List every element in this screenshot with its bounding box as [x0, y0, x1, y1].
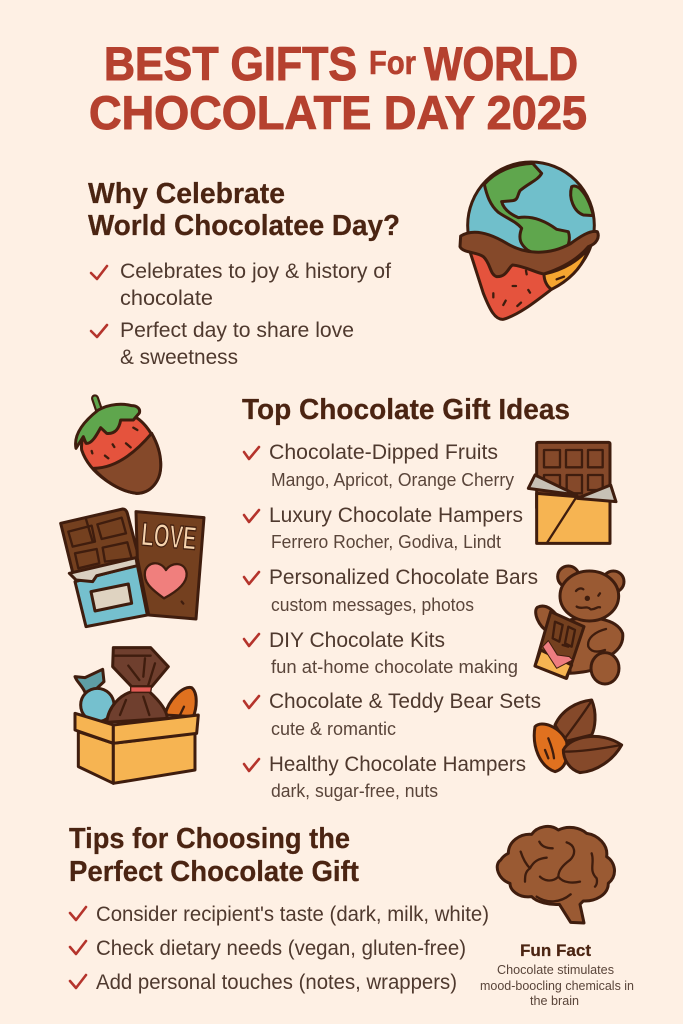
callout: fun fact	[480, 941, 634, 1008]
item: luxury hampers: Luxury Chocolate Hampers	[269, 503, 523, 527]
icon: gift box of chocolates	[75, 648, 198, 783]
item: teddy bear sets: cute & romantic	[271, 719, 396, 739]
callout: fun fact: Chocolate stimulates	[497, 963, 614, 977]
icon: chocolate bars with love	[61, 509, 204, 627]
item: dipped fruits: Chocolate-Dipped Fruits	[269, 440, 498, 464]
item: healthy hampers	[244, 752, 526, 801]
heading: top chocolate gift ideas: Top Chocolate Gift Ideas	[242, 394, 570, 426]
heading: tips: Perfect Chocolate Gift	[69, 856, 359, 888]
panel: top gift ideas	[242, 394, 570, 801]
item: diy kits: fun at-home chocolate making	[271, 657, 518, 677]
title	[89, 37, 587, 139]
icon: dipped strawberry	[76, 398, 161, 493]
panel: why celebrate	[88, 178, 400, 369]
icon: brain	[497, 826, 614, 923]
item: luxury hampers	[244, 503, 523, 552]
title: WORLD	[424, 37, 578, 90]
item: teddy bear sets: Chocolate & Teddy Bear Sets	[269, 689, 541, 713]
item: diy kits: DIY Chocolate Kits	[269, 628, 445, 652]
icon: teddy bear with chocolate	[535, 566, 624, 684]
tip: personal touches: Add personal touches (notes, wrappers)	[96, 970, 457, 994]
item: healthy hampers: Healthy Chocolate Hampers	[269, 752, 526, 776]
item: personalized bars: Personalized Chocolate Bars	[269, 565, 538, 589]
bullet: share love	[91, 318, 354, 369]
item: luxury hampers: Ferrero Rocher, Godiva, Lindt	[271, 532, 501, 552]
bullet: share love: Perfect day to share love	[120, 318, 354, 342]
heading: why celebrate: Why Celebrate	[88, 178, 285, 210]
item: personalized bars: custom messages, photos	[271, 595, 474, 615]
callout: fun fact: mood-boocling chemicals in	[480, 979, 634, 993]
title: For	[369, 44, 416, 81]
title: CHOCOLATE DAY 2025	[89, 86, 587, 139]
item: teddy bear sets	[244, 689, 541, 739]
panel: tips	[69, 823, 489, 994]
item: healthy hampers: dark, sugar-free, nuts	[271, 781, 438, 801]
heading: why celebrate	[88, 178, 400, 242]
bullet: share love: & sweetness	[120, 345, 238, 369]
bullet: joy and history: chocolate	[120, 286, 213, 310]
item: personalized bars	[244, 565, 538, 615]
tip: taste: Consider recipient's taste (dark, milk, white)	[96, 902, 489, 926]
heading: tips: Tips for Choosing the	[69, 823, 350, 855]
icon: chocolate-dipped globe	[460, 162, 598, 319]
item: dipped fruits: Mango, Apricot, Orange Cherry	[271, 470, 514, 490]
bullet: joy and history	[91, 259, 391, 310]
item: dipped fruits	[244, 440, 514, 490]
heading: tips	[69, 823, 359, 888]
item: diy kits	[244, 628, 518, 677]
heading: why celebrate: World Chocolatee Day?	[88, 210, 400, 242]
tip: dietary: Check dietary needs (vegan, gluten-free)	[96, 936, 466, 960]
callout: fun fact: Fun Fact	[520, 941, 591, 960]
icon: cocoa beans	[534, 700, 622, 773]
icon: wrapped chocolate bar	[528, 442, 616, 543]
label: love: LOVE	[140, 515, 198, 557]
title: BEST GIFTS	[104, 37, 357, 90]
bullet: joy and history: Celebrates to joy & history of	[120, 259, 391, 283]
callout: fun fact: the brain	[530, 994, 579, 1008]
